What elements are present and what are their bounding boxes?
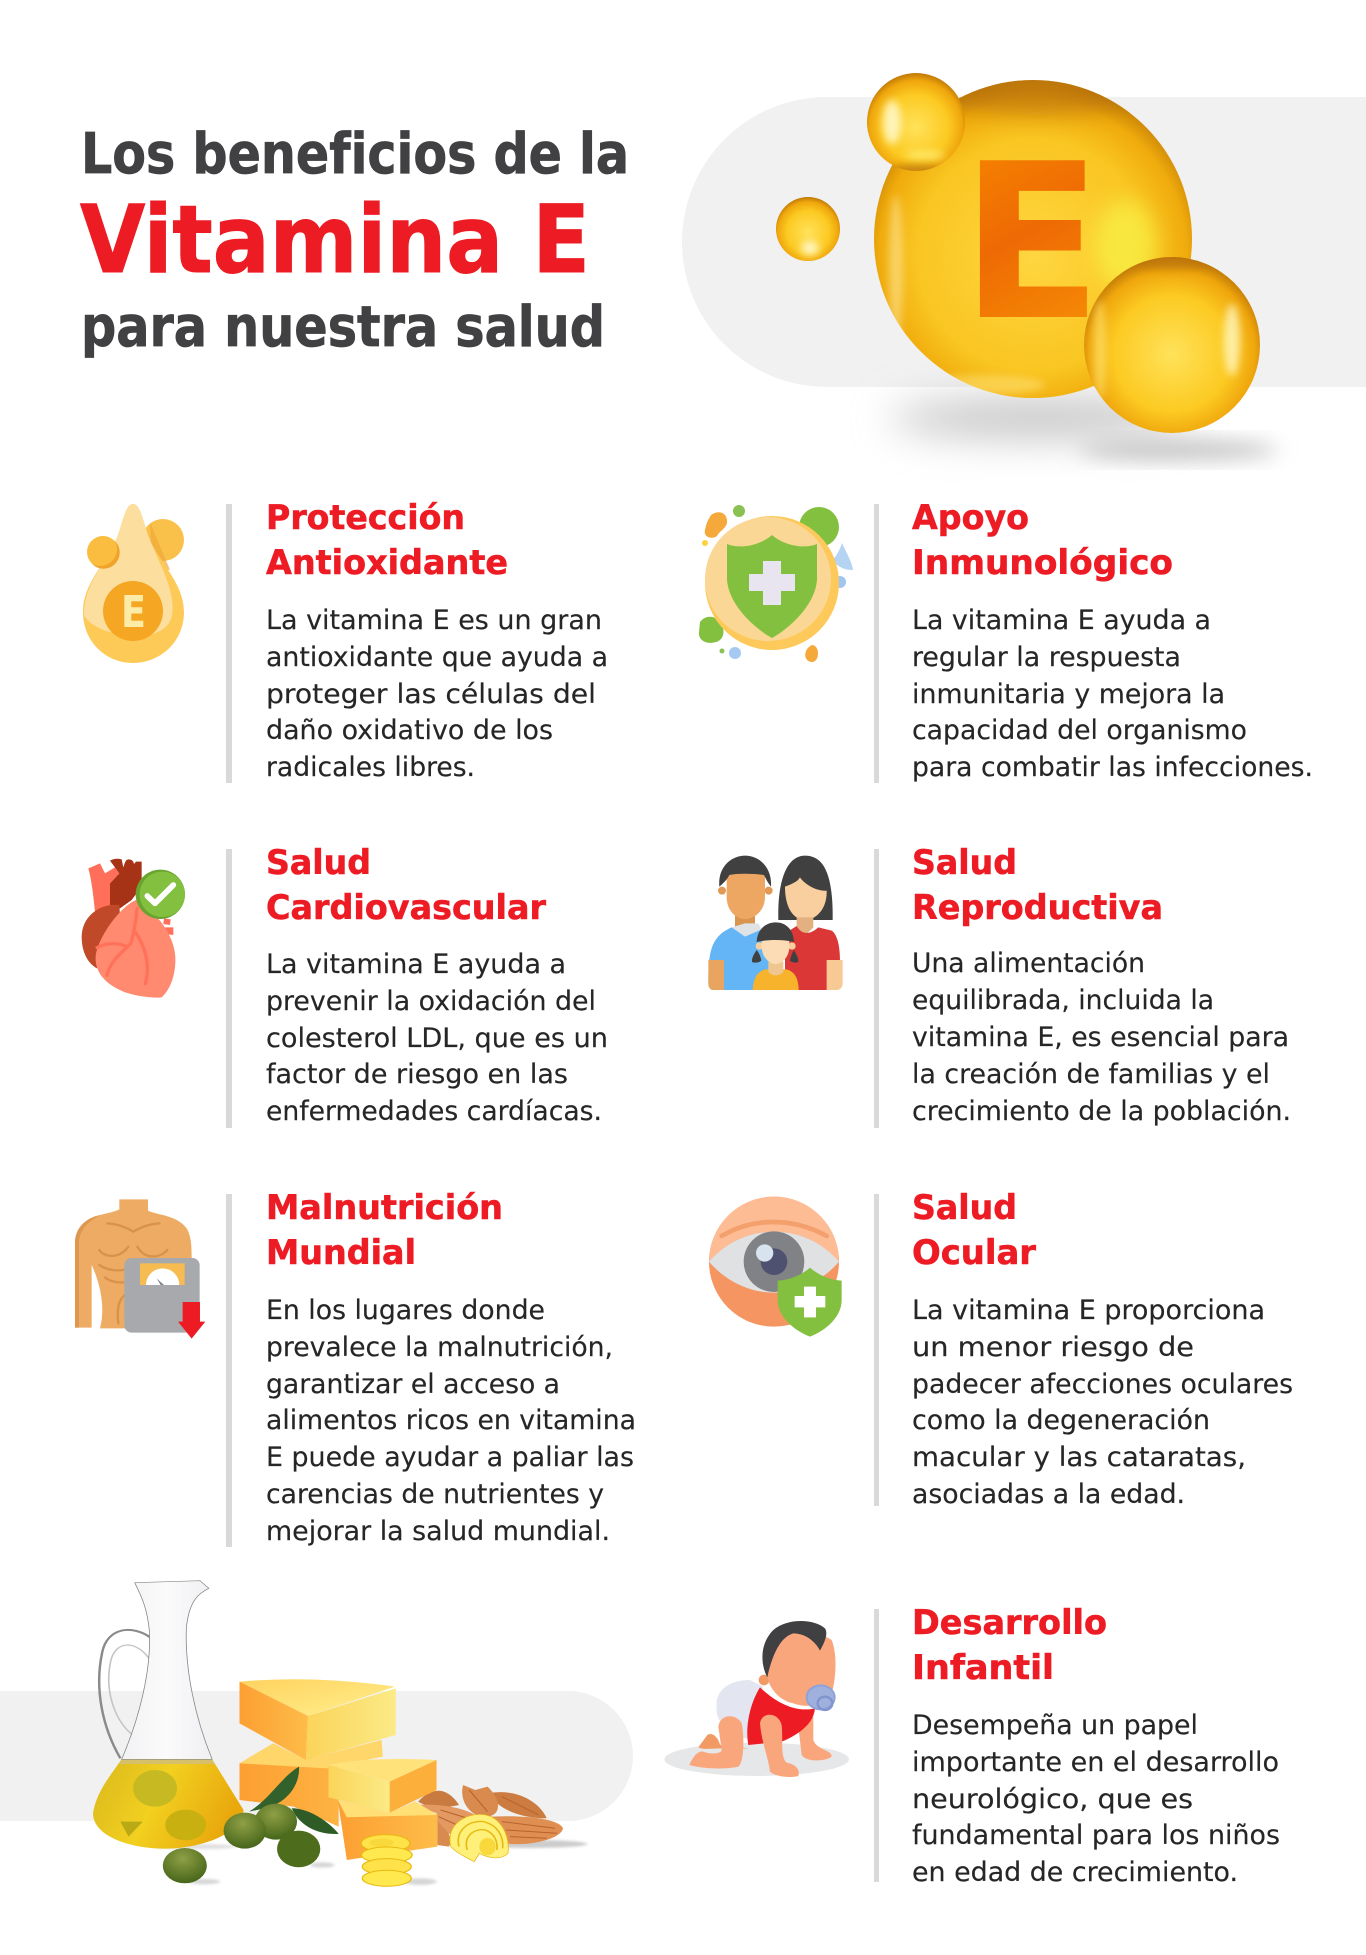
heading: Reproductiva [912,888,1163,928]
body text: En los lugares donde [266,1295,545,1326]
small capsule top left [867,73,965,179]
body text: La vitamina E es un gran [266,605,602,636]
panel: Salud Ocular [709,1188,1293,1510]
body text: crecimiento de la población. [912,1096,1291,1127]
icon: oil drop with E: E [121,587,146,638]
body text: proteger las células del [266,679,596,710]
heading: Cardiovascular [266,888,547,928]
heading [912,1188,1037,1273]
heading: Mundial [266,1233,416,1273]
divider [226,504,232,783]
divider [874,1194,879,1506]
jug glass [122,1581,212,1759]
heading: Ocular [912,1233,1037,1273]
body text: en edad de crecimiento. [912,1857,1238,1888]
heading: Desarrollo [912,1603,1107,1643]
panel: Salud Cardiovascular [82,843,608,1128]
panel: Salud Reproductiva [708,843,1291,1128]
olive leaves [249,1767,339,1834]
body text: antioxidante que ayuda a [266,642,608,673]
butter curls [361,1814,508,1886]
body text: padecer afecciones oculares [912,1369,1293,1400]
title: para nuestra salud [81,295,605,360]
body text: carencias de nutrientes y [266,1479,604,1510]
panel: Malnutrición Mundial [75,1188,636,1547]
title: Los beneficios de la [81,122,629,187]
illustration: foods rich in vitamin E [0,1581,633,1886]
body text [266,1295,636,1547]
icon: heart [82,859,185,998]
divider [226,849,232,1128]
body text: radicales libres. [266,752,475,783]
capsule bottom right [1084,254,1260,433]
capsule shadows [890,398,1278,460]
body text: factor de riesgo en las [266,1059,568,1090]
heading: Protección [266,498,465,538]
panel: Desarrollo Infantil [664,1603,1280,1888]
heading: Antioxidante [266,543,508,583]
heading: Salud [912,1188,1017,1228]
divider [874,1609,879,1882]
shadows [155,1840,588,1885]
icon: shield [699,505,853,662]
divider [874,504,879,783]
body text: E puede ayudar a paliar las [266,1442,634,1473]
body text [266,605,608,783]
large capsule with letter E [874,70,1192,398]
body text: vitamina E, es esencial para [912,1022,1289,1053]
body text: capacidad del organismo [912,715,1247,746]
icon: crawling baby [664,1621,849,1777]
icon: eye with shield [709,1197,842,1337]
body text: mejorar la salud mundial. [266,1516,610,1547]
body text: inmunitaria y mejora la [912,679,1225,710]
heading: Malnutrición [266,1188,503,1228]
title: Vitamina E [80,186,590,295]
divider [226,1194,232,1547]
heading: Salud [266,843,371,883]
grey pill background [0,1691,633,1821]
body text: para combatir las infecciones. [912,752,1313,783]
heading: Infantil [912,1648,1054,1688]
body text [912,605,1313,783]
heading: Inmunológico [912,543,1173,583]
grey pill background [682,97,1366,387]
heading: Salud [912,843,1017,883]
olives in oil [120,1770,206,1840]
icon: torso with scale [75,1199,205,1339]
body text: como la degeneración [912,1405,1210,1436]
body text: equilibrada, incluida la [912,985,1214,1016]
heading: Apoyo [912,498,1029,538]
body text: la creación de familias y el [912,1059,1270,1090]
body text: La vitamina E ayuda a [912,605,1211,636]
body text: alimentos ricos en vitamina [266,1405,636,1436]
jug oil [93,1759,244,1849]
tiny capsule [776,197,840,261]
body text: daño oxidativo de los [266,715,553,746]
body text: importante en el desarrollo [912,1747,1279,1778]
body text: colesterol LDL, que es un [266,1023,608,1054]
body text [266,949,608,1127]
heading [266,498,508,583]
olives [163,1804,320,1883]
panel: Protección Antioxidante [83,498,608,783]
title [80,122,629,360]
body text: neurológico, que es [912,1784,1193,1815]
body text: macular y las cataratas, [912,1442,1246,1473]
cheese wedge top [239,1679,396,1760]
body text: Una alimentación [912,948,1145,979]
body text [912,1295,1293,1510]
body text: La vitamina E proporciona [912,1295,1265,1326]
body text: un menor riesgo de [912,1332,1194,1363]
icon: family [708,856,843,990]
body text: prevenir la oxidación del [266,986,596,1017]
almonds [416,1785,563,1847]
body text [912,948,1291,1127]
body text: garantizar el acceso a [266,1369,560,1400]
body text: prevalece la malnutrición, [266,1332,613,1363]
body text: fundamental para los niños [912,1820,1280,1851]
cheese small blocks [328,1759,437,1860]
hero: vitamin E capsules on grey pill [682,70,1366,460]
body text: enfermedades cardíacas. [266,1096,602,1127]
body text [912,1710,1280,1888]
body text: regular la respuesta [912,642,1181,673]
large capsule with letter E: E [961,117,1102,368]
divider [874,849,879,1128]
heading [912,843,1163,928]
heading [912,1603,1107,1688]
jug handle [99,1630,150,1758]
body text: Desempeña un papel [912,1710,1198,1741]
icon: oil drop with E [83,504,184,663]
heading [266,843,547,928]
cheese blocks lower [239,1740,383,1827]
heading [266,1188,503,1273]
body text: La vitamina E ayuda a [266,949,566,980]
panel: Apoyo Inmunológico [699,498,1313,783]
heading [912,498,1173,583]
body text: asociadas a la edad. [912,1479,1185,1510]
